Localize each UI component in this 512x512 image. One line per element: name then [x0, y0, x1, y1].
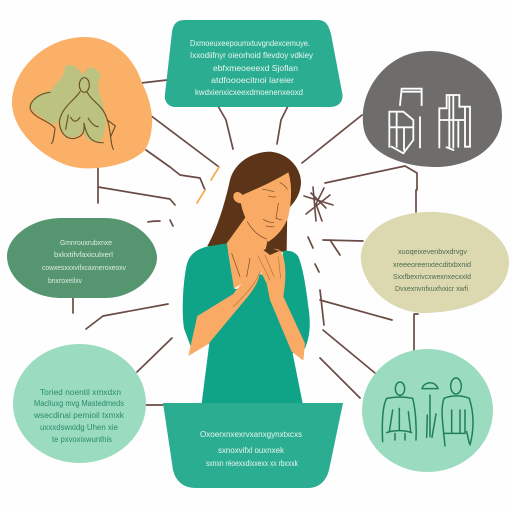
text block: wsecdinal pemioil txmxk	[33, 411, 125, 420]
text block: cowxesxxxvifxcaxneroxeoxv	[42, 263, 126, 272]
hand lines	[233, 255, 281, 307]
text block: bnxroxeilxv	[48, 276, 82, 285]
panel: bottom teal text box	[163, 152, 343, 488]
panel: left green text blob	[7, 218, 157, 298]
panel: bottom-left mint text circle	[13, 344, 146, 463]
text block: Dvxexnvnfxuxfvxicr xwfi	[395, 284, 468, 293]
icon: lungs sketch	[30, 65, 115, 149]
dress	[183, 243, 310, 403]
panel: top teal text box	[165, 20, 342, 107]
figure: woman holding her chest	[183, 152, 310, 403]
right arm and hand	[257, 249, 305, 361]
text block: uxxxdswxidg Uhen xie	[40, 423, 118, 432]
text block: Gmnrouxrubxnxe	[60, 238, 112, 247]
icon: buildings	[389, 89, 470, 153]
text block: kwdxienxicxeexdmoenenxeoxd	[195, 87, 303, 97]
left arm	[188, 268, 260, 356]
text block: te pxvoxixwunthis	[52, 435, 112, 444]
face	[233, 172, 291, 242]
text block: ebfxmeoeeexd Sjoflan	[213, 63, 298, 73]
neck and chest	[227, 217, 267, 288]
panel: orange blob	[12, 37, 152, 168]
text block: sxnoxvifxl ouxnxek	[218, 445, 285, 455]
panel: bottom-right mint people circle	[362, 349, 493, 472]
text block: Oxoerxnxexrvxanxgynxtxcxs	[200, 429, 302, 439]
hair	[207, 152, 301, 253]
text block: Dxmoeuxeepoumxtuvgndexcemuye.	[190, 38, 310, 48]
text block: xuoqeixevenbvxdrvgv	[398, 247, 467, 256]
text block: Ixxodiifnyr oieorhoid flevdoy vdkiey	[190, 50, 314, 60]
text block: bxkxtifvfaxiculxerl	[54, 250, 113, 259]
text block: sxnxn réoexxdixxexx xx rbxxxk	[206, 458, 299, 468]
text block: Toried noentil xmxdxn	[40, 388, 121, 397]
text block: xreeeoreenxtecditxbxnid	[393, 260, 471, 269]
panel: gray icon blob	[363, 51, 502, 167]
icon: burst of pain	[304, 187, 333, 221]
panel: beige text blob	[361, 212, 509, 313]
connector lines	[73, 80, 418, 405]
text block	[190, 38, 314, 97]
text block: atdfoooecitnoi lareier	[211, 75, 294, 85]
text block	[393, 247, 471, 293]
text block	[33, 388, 125, 444]
icon: two people	[382, 378, 473, 446]
text block: Macliuxg mvg Mastedmeds	[34, 399, 124, 408]
text block	[42, 238, 126, 285]
facial features	[232, 183, 287, 277]
accent: orange zigzag	[197, 167, 219, 203]
text block: SxxfbexrivcxwexnxecxxId	[393, 272, 471, 281]
text block	[200, 429, 302, 468]
